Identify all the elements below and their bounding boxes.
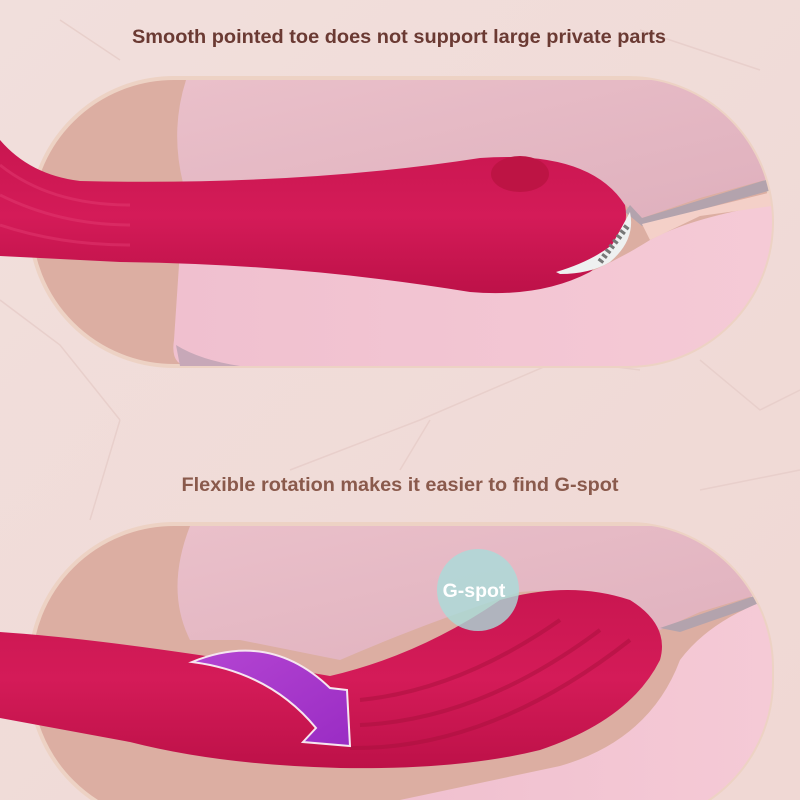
panel: bottom diagram	[0, 524, 772, 800]
shadow crease	[625, 178, 772, 226]
probe: bottom	[0, 590, 662, 768]
heading: bottom: Flexible rotation makes it easier to find G-spot	[182, 474, 619, 496]
panel: top diagram	[0, 78, 772, 366]
G-spot marker	[437, 549, 519, 631]
lower tissue	[400, 598, 772, 800]
G-spot marker: G-spot	[443, 580, 506, 602]
lower tissue	[173, 204, 772, 366]
heading: top: Smooth pointed toe does not support large private parts	[132, 26, 666, 48]
probe: top	[0, 140, 626, 293]
arrow: rotation	[192, 651, 350, 746]
tip highlight	[556, 212, 631, 274]
button	[491, 156, 549, 192]
upper tissue	[178, 526, 772, 660]
upper tissue	[177, 80, 772, 218]
